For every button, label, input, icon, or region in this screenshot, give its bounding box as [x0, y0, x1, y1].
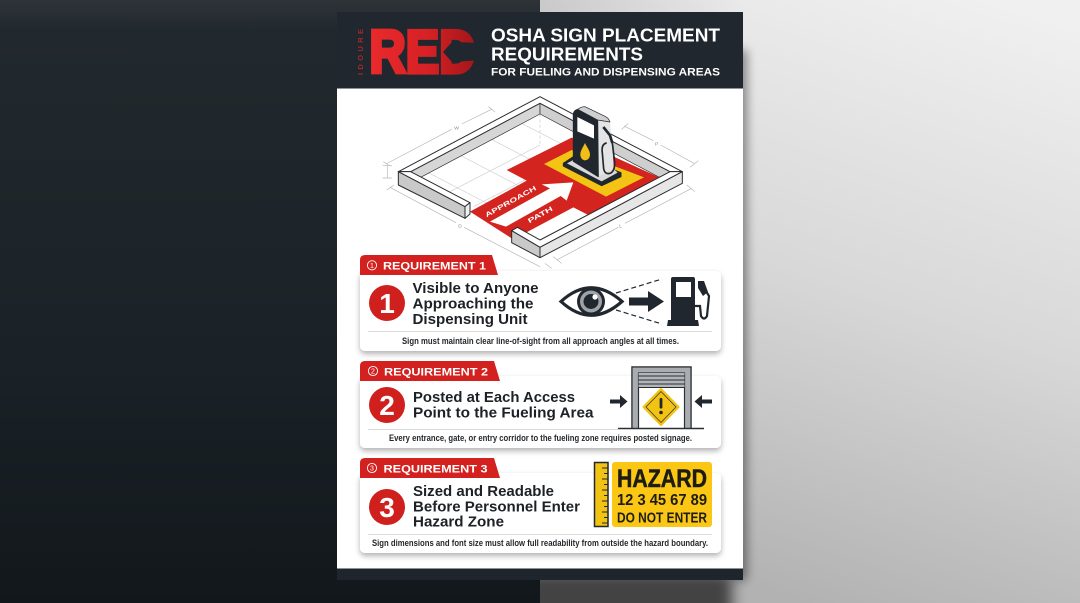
- hazard sign: HAZARD: [617, 465, 707, 493]
- arrow labels: PATH: [527, 206, 554, 225]
- card 1 divider and caption: Sign must maintain clear line-of-sight from all approach angles at all times.: [402, 336, 679, 347]
- sightlines: [616, 279, 662, 324]
- arrow in from right: [694, 395, 712, 408]
- hazard sign: [612, 462, 712, 527]
- card 2 number: 2: [379, 390, 395, 421]
- pump screen: [577, 117, 594, 139]
- card 2 tab: [360, 361, 500, 381]
- card 2 panel: [360, 376, 721, 448]
- dimension letters: [454, 125, 659, 230]
- pump base: [563, 157, 621, 186]
- logo side text: IDOURE: [356, 29, 365, 75]
- arrow labels: APPROACH: [484, 185, 538, 219]
- eye: [561, 288, 622, 316]
- dimension letters: W: [454, 125, 459, 131]
- poster shadow: [500, 50, 747, 603]
- card 3 number: [369, 489, 405, 525]
- pump: [667, 277, 709, 326]
- header band: [337, 12, 743, 88]
- fuel drop: [580, 143, 590, 160]
- floor grid: [420, 114, 583, 210]
- shutter: [638, 373, 684, 387]
- warning diamond: [644, 389, 678, 425]
- title: OSHA SIGN PLACEMENT: [491, 26, 720, 46]
- title: REQUIREMENTS: [491, 44, 643, 64]
- icon: eye sightline to pump: [561, 277, 709, 326]
- card 1 heading: [412, 280, 538, 328]
- arrow: [629, 291, 664, 312]
- requirement card 3: [360, 458, 721, 553]
- yellow pad: [544, 150, 644, 197]
- card 2 heading: Posted at Each Access: [413, 389, 575, 406]
- card 3 heading: Hazard Zone: [413, 514, 504, 530]
- card 3 heading: Sized and Readable: [413, 483, 554, 500]
- card 3 divider and caption: Sign dimensions and font size must allow full readability from outside the hazard boundary.: [372, 538, 708, 549]
- title: [491, 26, 720, 79]
- pump front: [573, 109, 598, 177]
- fuel pump: [563, 107, 621, 186]
- pump cap: [578, 107, 610, 122]
- door frame: [632, 367, 691, 428]
- card 2 tab: 2: [371, 369, 375, 376]
- card 3 panel: [360, 473, 721, 553]
- card 2 tab: REQUIREMENT 2: [384, 366, 488, 378]
- front right wall: [512, 172, 682, 258]
- card 1 number: 1: [379, 288, 395, 319]
- ground line: [618, 428, 704, 430]
- card 3 tab: REQUIREMENT 3: [384, 463, 488, 475]
- card 3 heading: Before Personnel Enter: [413, 498, 580, 516]
- card 2 heading: Point to the Fueling Area: [413, 404, 594, 422]
- card 1 number: [369, 285, 405, 321]
- card 3 tab: 3: [370, 466, 374, 473]
- arrow in from left: [610, 395, 628, 408]
- icon: access door with warning sign: [610, 367, 712, 428]
- dimension lines: [383, 107, 698, 268]
- icon: ruler: [594, 462, 608, 526]
- footer band: [337, 568, 743, 580]
- card 3 tab: [360, 458, 500, 478]
- card 1 heading: Visible to Anyone: [412, 280, 538, 297]
- red floor zone: [470, 138, 659, 238]
- back walls: [398, 97, 682, 177]
- requirement card 2: [360, 361, 721, 448]
- card 1 tab: 1: [370, 263, 374, 270]
- card 3 heading: [413, 483, 580, 530]
- isometric diagram: [383, 97, 698, 268]
- hazard sign: DO NOT ENTER: [617, 510, 707, 527]
- card 2 number: [369, 387, 405, 423]
- background: light right half: [540, 0, 1080, 603]
- subtitle: FOR FUELING AND DISPENSING AREAS: [491, 67, 720, 79]
- background: dark left half: [0, 0, 540, 603]
- pump side: [598, 120, 614, 177]
- card 1 heading: Approaching the: [412, 296, 534, 312]
- arrow labels: [484, 185, 554, 225]
- dimension letters: P: [655, 141, 659, 147]
- requirement card 1: [360, 255, 721, 351]
- dimension letters: L: [619, 223, 622, 229]
- card 3 number: 3: [379, 492, 395, 523]
- front left wall: [398, 172, 470, 218]
- card 2 divider and caption: Every entrance, gate, or entry corridor to the fueling zone requires posted signage.: [389, 433, 692, 444]
- logo: RED: [370, 18, 476, 86]
- card 1 heading: Dispensing Unit: [412, 311, 528, 328]
- pump nozzle: [603, 127, 612, 143]
- hazard sign: 12 3 45 67 89: [617, 492, 707, 509]
- poster: [337, 12, 743, 580]
- logo notch: [443, 42, 482, 62]
- poster body: [337, 12, 743, 580]
- dimension letters: D: [458, 224, 462, 230]
- card 1 panel: [360, 271, 721, 351]
- top surface: [398, 97, 682, 172]
- inner faces: [411, 103, 540, 177]
- card 1 tab: [360, 255, 498, 275]
- card 2 heading: [413, 389, 594, 422]
- card 1 tab: REQUIREMENT 1: [383, 260, 486, 272]
- approach arrow: [490, 182, 573, 227]
